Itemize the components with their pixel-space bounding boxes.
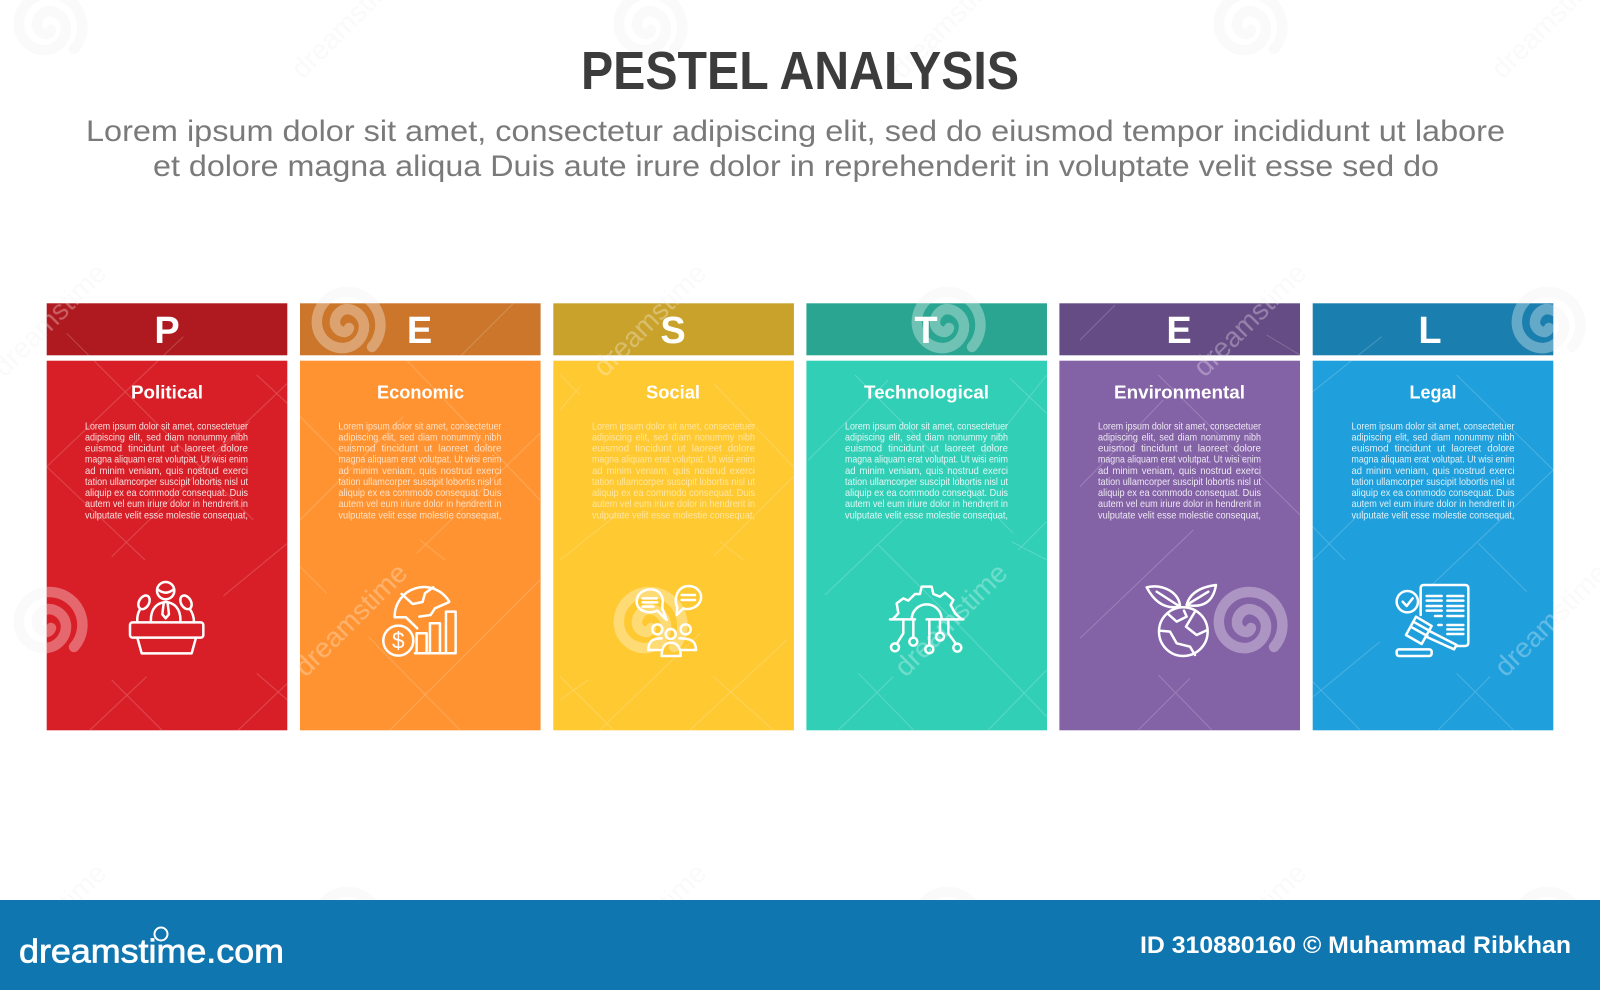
text block: political: Lorem ipsum dolor sit amet, consectetuer xyxy=(85,420,248,432)
header: L: L xyxy=(1418,310,1442,352)
text block: environmental: magna aliquam erat volutpat. Ut wisi enim xyxy=(1098,454,1261,466)
infographic canvas: dreamstime xyxy=(288,557,413,682)
text block: environmental: Lorem ipsum dolor sit amet, consectetuer xyxy=(1098,420,1261,432)
text block: economic: adipiscing elit, sed diam nonummy nibh xyxy=(338,431,502,443)
header: L xyxy=(1313,303,1553,355)
text block: economic: aliquip ex ea commodo consequat. Duis xyxy=(338,487,501,499)
text block: technological: Lorem ipsum dolor sit amet, consectetuer xyxy=(845,420,1008,432)
header: T: T xyxy=(914,310,938,352)
text block: economic: tation ullamcorper suscipit lobortis nisl ut xyxy=(338,476,501,488)
icon: speaker at podium xyxy=(130,582,203,653)
infographic canvas: dreamstime xyxy=(1187,857,1312,982)
text block: technological: euismod tincidunt ut laoreet dolore xyxy=(845,442,1008,454)
text block: environmental: autem vel eum iriure dolor in hendrerit in xyxy=(1098,498,1261,510)
text block: economic: ad minim veniam, quis nostrud exerci xyxy=(338,465,501,477)
text block: legal: ad minim veniam, quis nostrud exerci xyxy=(1352,465,1514,477)
text block: social: tation ullamcorper suscipit lobortis nisl ut xyxy=(592,476,755,488)
infographic canvas: dreamstime xyxy=(1187,257,1312,382)
text block: social: euismod tincidunt ut laoreet dolore xyxy=(592,442,755,454)
text block: environmental: aliquip ex ea commodo consequat. Duis xyxy=(1098,487,1261,499)
text block: legal: vulputate velit esse molestie consequat, xyxy=(1352,509,1514,521)
header: P: P xyxy=(154,310,180,352)
text block: social xyxy=(592,420,755,521)
card body: economic xyxy=(300,361,541,730)
heading: Environmental: Environmental xyxy=(1114,382,1245,402)
footer credit: ID 310880160 © Muhammad Ribkhan xyxy=(1140,932,1571,959)
infographic canvas: dreamstime xyxy=(587,257,712,382)
panel: legal xyxy=(1313,303,1553,730)
text block: environmental: euismod tincidunt ut laoreet dolore xyxy=(1098,442,1261,454)
text block: political: magna aliquam erat volutpat. Ut wisi enim xyxy=(85,454,248,466)
text block: social: Lorem ipsum dolor sit amet, consectetuer xyxy=(592,420,755,432)
heading: Economic: Economic xyxy=(377,382,464,402)
text block: technological xyxy=(845,420,1008,521)
card body: environmental xyxy=(1059,361,1300,730)
card body: legal xyxy=(1313,361,1553,730)
panel: environmental xyxy=(1059,303,1300,730)
infographic canvas: dreamstime xyxy=(587,857,712,982)
text block: social: adipiscing elit, sed diam nonummy nibh xyxy=(592,431,755,443)
panel: social xyxy=(553,303,794,730)
text block: economic: vulputate velit esse molestie consequat, xyxy=(338,509,501,521)
text block: social: vulputate velit esse molestie consequat, xyxy=(592,509,755,521)
heading: Technological: Technological xyxy=(864,382,989,402)
text block: political xyxy=(85,420,248,521)
text block: economic: autem vel eum iriure dolor in hendrerit in xyxy=(338,498,502,510)
text block: political: aliquip ex ea commodo consequat. Duis xyxy=(85,487,248,499)
icon: document with gavel xyxy=(1397,585,1468,656)
text block: environmental: adipiscing elit, sed diam nonummy nibh xyxy=(1098,431,1261,443)
text block: technological: vulputate velit esse molestie consequat, xyxy=(845,509,1008,521)
subtitle text block xyxy=(86,115,1505,183)
text block: political: autem vel eum iriure dolor in hendrerit in xyxy=(85,498,248,510)
text block: legal: magna aliquam erat volutpat. Ut wisi enim xyxy=(1352,454,1515,466)
text block: legal: euismod tincidunt ut laoreet dolore xyxy=(1352,442,1515,454)
text block: political: vulputate velit esse molestie consequat, xyxy=(85,509,248,521)
text block: environmental: ad minim veniam, quis nostrud exerci xyxy=(1098,465,1261,477)
panel: economic xyxy=(300,303,541,730)
infographic canvas: dreamstime xyxy=(888,557,1013,682)
text block: technological: autem vel eum iriure dolor in hendrerit in xyxy=(845,498,1008,510)
icon: globe, coin and bars: $ xyxy=(392,628,405,654)
text block: technological: aliquip ex ea commodo consequat. Duis xyxy=(845,487,1008,499)
footer bar xyxy=(0,900,1600,990)
heading: Political: Political xyxy=(131,382,203,402)
text block: environmental: vulputate velit esse molestie consequat, xyxy=(1098,509,1261,521)
text block: technological: tation ullamcorper suscipit lobortis nisl ut xyxy=(845,476,1008,488)
header: E: E xyxy=(407,310,432,352)
infographic canvas: dreamstime xyxy=(288,557,413,682)
text block: economic: magna aliquam erat volutpat. Ut wisi enim xyxy=(338,454,502,466)
panel: political xyxy=(47,303,287,730)
text block: political: adipiscing elit, sed diam nonummy nibh xyxy=(85,431,248,443)
text block: legal: Lorem ipsum dolor sit amet, consectetuer xyxy=(1352,420,1515,432)
header: S xyxy=(553,303,794,355)
text block: technological: magna aliquam erat volutpat. Ut wisi enim xyxy=(845,454,1008,466)
text block: legal: aliquip ex ea commodo consequat. Duis xyxy=(1352,487,1514,499)
text block: technological: ad minim veniam, quis nostrud exerci xyxy=(845,465,1008,477)
text block: social: magna aliquam erat volutpat. Ut wisi enim xyxy=(592,454,755,466)
icon: speech bubbles and people xyxy=(637,586,701,656)
card body: technological xyxy=(806,361,1047,730)
infographic canvas: dreamstime xyxy=(587,257,712,382)
text block: political: tation ullamcorper suscipit lobortis nisl ut xyxy=(85,476,248,488)
panel: technological xyxy=(806,303,1047,730)
text block: social: autem vel eum iriure dolor in hendrerit in xyxy=(592,498,755,510)
subtitle text block: et dolore magna aliqua Duis aute irure dolor in reprehenderit in voluptate velit esse sed do xyxy=(153,150,1439,183)
card body: social xyxy=(553,361,794,730)
subtitle text block: Lorem ipsum dolor sit amet, consectetur adipiscing elit, sed do eiusmod tempor incididunt ut labore xyxy=(86,115,1505,148)
text block: political: euismod tincidunt ut laoreet dolore xyxy=(85,442,248,454)
text block: legal: autem vel eum iriure dolor in hendrerit in xyxy=(1352,498,1515,510)
header: P xyxy=(47,303,287,355)
icon: gear with circuit xyxy=(890,587,963,653)
card body: political xyxy=(47,361,287,730)
text block: technological: adipiscing elit, sed diam nonummy nibh xyxy=(845,431,1008,443)
header: E xyxy=(300,303,541,355)
text block: political: ad minim veniam, quis nostrud exerci xyxy=(85,465,248,477)
header: S: S xyxy=(660,310,686,352)
heading: Social: Social xyxy=(646,382,700,402)
text block: legal: adipiscing elit, sed diam nonummy nibh xyxy=(1352,431,1515,443)
footer logo: dreamstime.com: dreamstime.com xyxy=(19,932,284,970)
text block: economic xyxy=(338,420,502,521)
title: PESTEL ANALYSIS xyxy=(581,41,1019,101)
header: E: E xyxy=(1166,310,1192,352)
text block: environmental: tation ullamcorper suscipit lobortis nisl ut xyxy=(1098,476,1261,488)
icon: earth with leaves xyxy=(1147,585,1216,656)
text block: legal: tation ullamcorper suscipit lobortis nisl ut xyxy=(1352,476,1515,488)
text block: legal xyxy=(1352,420,1515,521)
infographic canvas: dreamstime xyxy=(1187,257,1312,382)
text block: social: aliquip ex ea commodo consequat. Duis xyxy=(592,487,755,499)
heading: Legal: Legal xyxy=(1410,382,1456,402)
text block: economic: euismod tincidunt ut laoreet dolore xyxy=(338,442,502,454)
header: T xyxy=(806,303,1047,355)
text block: social: ad minim veniam, quis nostrud exerci xyxy=(592,465,755,477)
text block: environmental xyxy=(1098,420,1261,521)
infographic canvas: dreamstime xyxy=(888,557,1013,682)
text block: economic: Lorem ipsum dolor sit amet, consectetuer xyxy=(338,420,502,432)
header: E xyxy=(1059,303,1300,355)
icon: globe, coin and bars xyxy=(383,587,456,656)
